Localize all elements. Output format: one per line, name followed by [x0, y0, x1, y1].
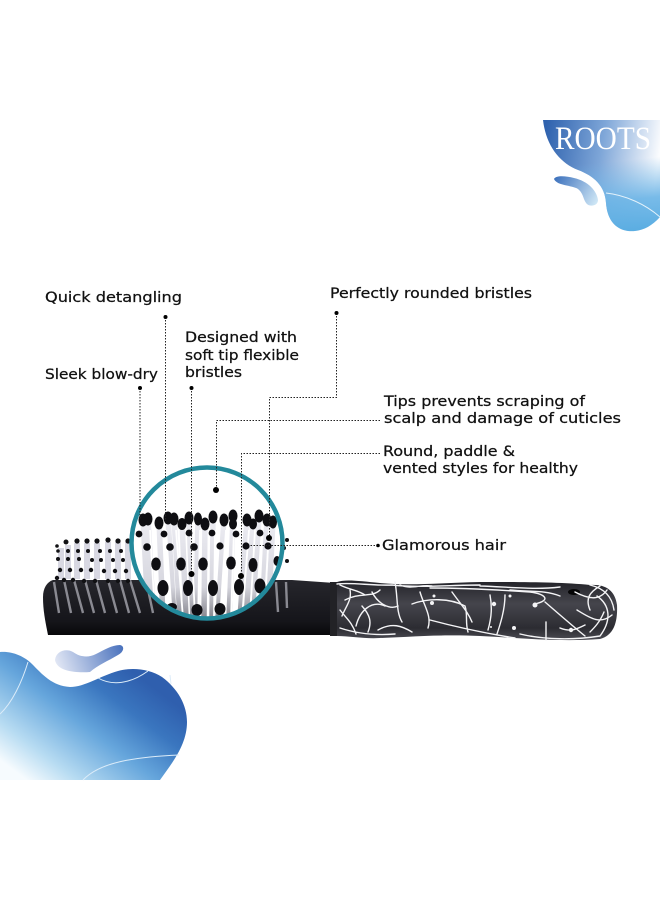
icon: small top swoosh — [554, 176, 598, 206]
label: round paddle vented: Round, paddle & — [383, 444, 515, 460]
brush: handle — [330, 580, 617, 640]
leader line: quick detangling — [164, 315, 168, 520]
leader line: tips — [213, 420, 380, 493]
label: sleek blow-dry: Sleek blow-dry — [45, 367, 158, 383]
label: round paddle vented — [383, 444, 578, 477]
label: designed with soft tip flexible bristles: bristles — [185, 365, 242, 381]
label: tips prevents scraping — [383, 394, 621, 427]
leader line: designed with — [188, 386, 194, 577]
label: designed with soft tip flexible bristles: soft tip flexible — [185, 348, 299, 364]
leader line: sleek blow-dry — [138, 386, 142, 520]
magnified bristles circle — [132, 468, 282, 618]
blob: top right logo shape — [543, 120, 660, 231]
blob: bottom left shape — [0, 652, 187, 780]
logo: ROOTS: ROOTS — [555, 121, 651, 157]
label: tips prevents scraping: Tips prevents scraping of — [383, 394, 586, 410]
label: quick detangling: Quick detangling — [45, 290, 182, 306]
label: designed with soft tip flexible bristles — [185, 330, 299, 381]
label: round paddle vented: vented styles for healthy — [383, 461, 578, 477]
label: designed with soft tip flexible bristles: Designed with — [185, 330, 297, 346]
label: perfectly rounded bristles: Perfectly rounded bristles — [330, 286, 532, 302]
leader line: perfectly rounded — [266, 311, 338, 541]
label: tips prevents scraping: scalp and damage of cuticles — [384, 411, 621, 427]
leader line: round paddle — [238, 454, 380, 579]
brush: head — [43, 537, 335, 635]
brush: small rear bristles — [55, 537, 289, 583]
leader line: glamorous — [250, 544, 380, 547]
label: glamorous hair: Glamorous hair — [382, 538, 506, 554]
icon: small bottom swoosh — [55, 645, 123, 672]
handle marble splatter — [337, 582, 614, 640]
